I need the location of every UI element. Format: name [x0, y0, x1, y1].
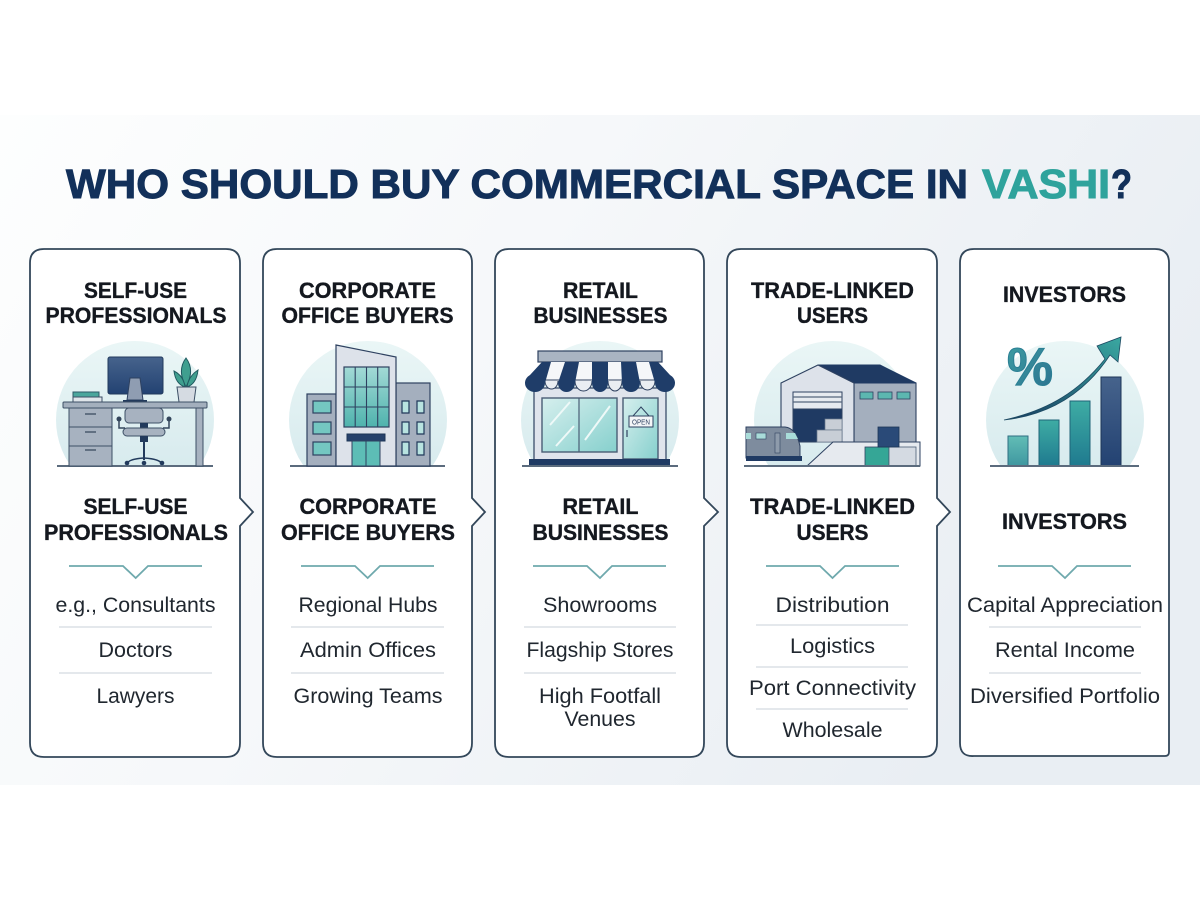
- panel: retail businesses: [495, 249, 718, 757]
- icon: desk with computer: [56, 341, 214, 467]
- heading: corporate office buyers repeated: CORPORATE: [300, 494, 436, 519]
- list: corporate examples: Growing Teams: [294, 685, 442, 708]
- icon: growth chart with percent: [986, 336, 1144, 467]
- heading: corporate office buyers: CORPORATE: [299, 278, 436, 303]
- heading: trade-linked users: [751, 278, 914, 328]
- list: retail examples: High Footfall: [539, 685, 661, 708]
- icon: office buildings: [289, 341, 447, 467]
- heading: trade-linked users: USERS: [797, 303, 868, 328]
- heading: self-use professionals repeated: SELF-USE: [84, 494, 188, 519]
- icon: storefront: [521, 341, 679, 467]
- title: VASHI: [982, 161, 1110, 207]
- heading: investors repeated: INVESTORS: [1002, 509, 1127, 534]
- list: trade examples: [749, 594, 917, 742]
- heading: corporate office buyers: [282, 278, 454, 328]
- list: corporate examples: [294, 594, 442, 708]
- heading: trade-linked users repeated: TRADE-LINKED: [750, 494, 915, 519]
- list: retail examples: [526, 594, 674, 731]
- panel: trade-linked users: [727, 249, 950, 757]
- heading: trade-linked users repeated: [750, 494, 915, 545]
- list: corporate examples: Regional Hubs: [298, 594, 438, 617]
- heading: corporate office buyers repeated: OFFICE BUYERS: [281, 520, 455, 545]
- list: trade examples: Port Connectivity: [749, 677, 917, 700]
- heading: retail businesses: [534, 278, 668, 328]
- title: WHO SHOULD BUY COMMERCIAL SPACE IN: [66, 161, 968, 207]
- heading: corporate office buyers repeated: [281, 494, 455, 545]
- list: investor benefits: Rental Income: [995, 639, 1135, 662]
- heading: self-use professionals repeated: [44, 494, 228, 545]
- list: self-use examples: Doctors: [98, 639, 172, 662]
- heading: self-use professionals: SELF-USE: [84, 278, 187, 303]
- list: retail examples: Flagship Stores: [526, 639, 674, 662]
- list: corporate examples: Admin Offices: [300, 639, 436, 662]
- heading: self-use professionals: [46, 278, 226, 328]
- heading: retail businesses repeated: RETAIL: [562, 494, 638, 519]
- list: self-use examples: Lawyers: [96, 685, 174, 708]
- list: investor benefits: Capital Appreciation: [967, 594, 1163, 617]
- heading: self-use professionals repeated: PROFESSIONALS: [44, 520, 228, 545]
- list: trade examples: Wholesale: [782, 719, 882, 742]
- heading: retail businesses repeated: BUSINESSES: [532, 520, 668, 545]
- heading: retail businesses repeated: [532, 494, 668, 545]
- heading: investors: INVESTORS: [1003, 282, 1126, 307]
- heading: retail businesses: RETAIL: [563, 278, 638, 303]
- panel: investors: [960, 249, 1169, 756]
- background band: [0, 115, 1200, 785]
- list: self-use examples: e.g., Consultants: [56, 594, 216, 617]
- list: retail examples: Venues: [564, 708, 636, 731]
- panel: corporate office buyers: [263, 249, 485, 757]
- list: trade examples: Logistics: [790, 635, 875, 658]
- list: trade examples: Distribution: [776, 594, 890, 617]
- heading: trade-linked users repeated: USERS: [796, 520, 868, 545]
- heading: corporate office buyers: OFFICE BUYERS: [282, 303, 454, 328]
- heading: retail businesses: BUSINESSES: [534, 303, 668, 328]
- list: investor benefits: Diversified Portfolio: [970, 685, 1160, 708]
- heading: trade-linked users: TRADE-LINKED: [751, 278, 914, 303]
- sign text: OPEN: [632, 420, 650, 426]
- list: self-use examples: [56, 594, 216, 708]
- percent sign: %: [1007, 338, 1053, 397]
- heading: self-use professionals: PROFESSIONALS: [46, 303, 226, 328]
- panel: self-use professionals: [30, 249, 253, 757]
- title: ?: [1111, 161, 1132, 207]
- list: retail examples: Showrooms: [543, 594, 657, 617]
- list: investor benefits: [967, 594, 1163, 708]
- icon: warehouse and train: [744, 341, 920, 467]
